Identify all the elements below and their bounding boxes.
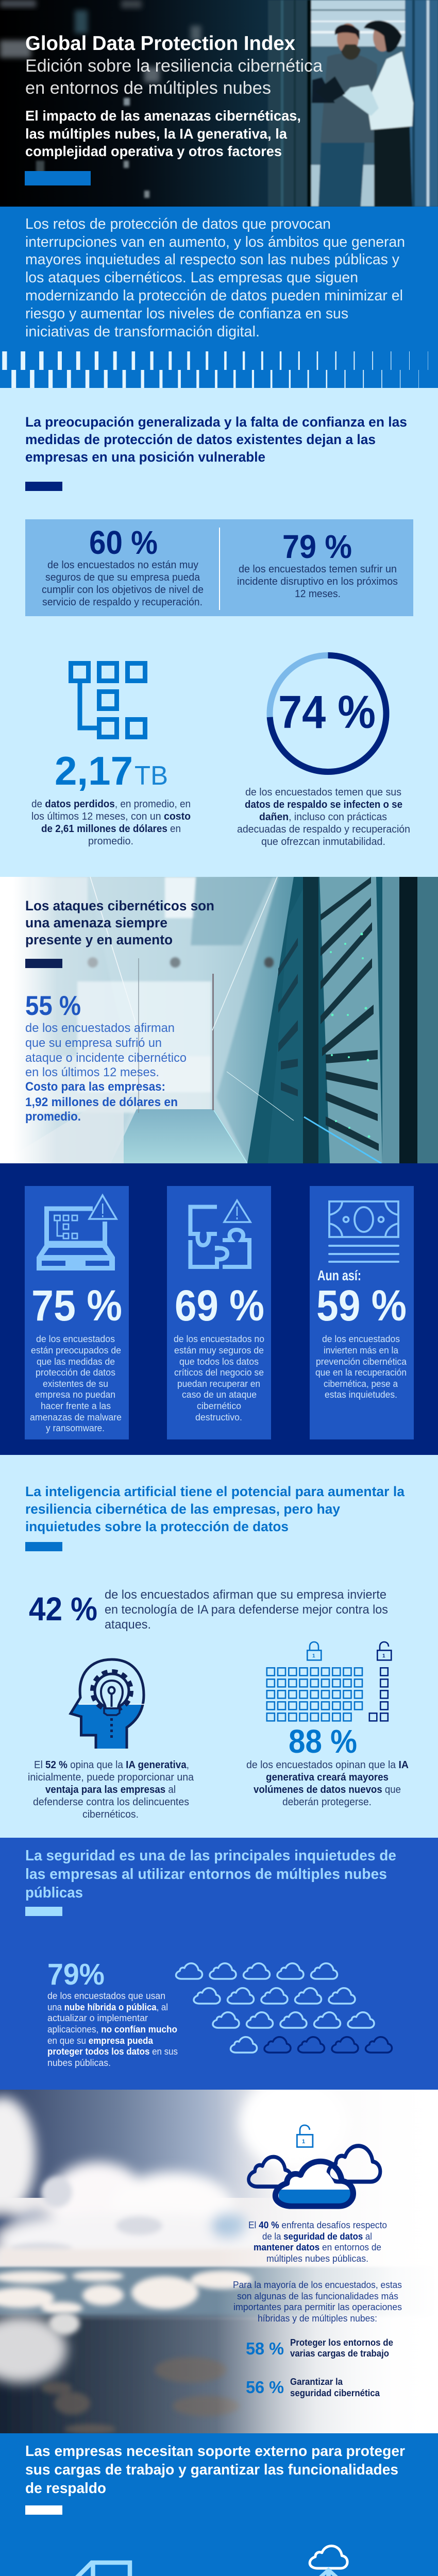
- subtitle: las múltiples nubes, la IA generativa, la: [25, 126, 287, 142]
- stat box: 60 % and 79 %: [25, 519, 413, 616]
- intro text: [25, 216, 405, 340]
- subtitle: [25, 108, 301, 159]
- heading: vulnerable position: La preocupación generalizada y la falta de confianza en las: [25, 414, 407, 430]
- heading: attacks: [25, 898, 214, 947]
- title: Edición sobre la resiliencia cibernética: [25, 56, 323, 76]
- heading: vulnerable position: empresas en una posición vulnerable: [25, 449, 265, 465]
- text: prevention investment: invierten más en la: [324, 1345, 399, 1355]
- text: attack cost: de los encuestados afirman: [25, 1021, 175, 1035]
- text: capabilities intro: [233, 2280, 402, 2324]
- card: 75 %: [25, 1186, 129, 1439]
- intro text: modernizando la protección de datos pueden minimizar el: [25, 287, 403, 304]
- text: attack cost: en los últimos 12 meses.: [25, 1065, 159, 1079]
- title: en entornos de múltiples nubes: [25, 78, 271, 98]
- heading: vulnerable position: [25, 414, 407, 465]
- title: Global Data Protection Index: [25, 32, 295, 55]
- stat: 55 %: 55 %: [25, 991, 81, 1021]
- panel: vulnerable position: [0, 388, 438, 877]
- text: 40 %: de la seguridad de datos al: [262, 2231, 372, 2242]
- text: prevention investment: estas inquietudes.: [325, 1389, 397, 1400]
- text: 52 %: [28, 1759, 194, 1820]
- stat: 88 %: 88 %: [289, 1723, 357, 1760]
- text: 40 %: múltiples nubes públicas.: [266, 2253, 368, 2264]
- accent bar: [25, 2505, 62, 2515]
- heading: external support: Las empresas necesitan soporte externo para proteger: [25, 2443, 405, 2460]
- panel: public cloud security: [0, 1838, 438, 2090]
- text: 52 %: cibernéticos.: [82, 1809, 139, 1820]
- text: 79%: actualizar o implementar: [47, 2013, 148, 2023]
- text: malware worry: de los encuestados: [36, 1334, 115, 1344]
- intro text: los ataques cibernéticos. Las empresas que siguen: [25, 269, 358, 286]
- heading: attacks: Los ataques cibernéticos son: [25, 898, 214, 913]
- icon: three clouds: [248, 2146, 380, 2209]
- heading: external support: de respaldo: [25, 2480, 106, 2497]
- text: malware worry: hacer frente a las: [41, 1401, 111, 1411]
- text: attack cost: que su empresa sufrió un: [25, 1036, 162, 1050]
- card: 69 %: 69 %: [175, 1281, 264, 1330]
- icon: open lock: [377, 1642, 391, 1660]
- heading: public cloud: [25, 1848, 396, 1901]
- heading: attacks: presente y en aumento: [25, 932, 173, 947]
- subtitle: El impacto de las amenazas cibernéticas,: [25, 108, 301, 124]
- text: critical data: destructivo.: [195, 1412, 242, 1422]
- text: malware worry: protección de datos: [36, 1367, 115, 1378]
- chart: 88 % square grid: [267, 1668, 388, 1721]
- stat: 2,17 TB: TB: [134, 761, 168, 791]
- text: backup infected: dañen, incluso con prácticas: [259, 811, 387, 823]
- text: 52 %: defenderse contra los delincuentes: [33, 1797, 189, 1808]
- heading: external support: sus cargas de trabajo y garantizar las funcionalidades: [25, 2462, 398, 2478]
- stat: 58 %: 58 %: [246, 2339, 284, 2358]
- text: critical data: caso de un ataque: [182, 1389, 257, 1400]
- stat: 42 %: de los encuestados afirman que su empresa invierte: [105, 1588, 386, 1602]
- text: backup infected: adecuadas de respaldo y recuperación: [237, 824, 410, 835]
- accent bar: [25, 482, 62, 491]
- stat: 2,17 TB: [55, 748, 168, 793]
- text: malware worry: existentes de su: [43, 1379, 108, 1389]
- text: prevention investment: [315, 1334, 407, 1400]
- photo: server corridor: [0, 877, 438, 1163]
- text: critical data: están muy seguros de: [174, 1345, 264, 1355]
- intro text: Los retos de protección de datos que provocan: [25, 216, 331, 232]
- text: malware worry: empresa no puedan: [35, 1389, 115, 1400]
- stat: 60 %: servicio de respaldo y recuperación.: [42, 597, 203, 608]
- photo: sky and clouds: [0, 2076, 438, 2439]
- text: attack cost: 1,92 millones de dólares en: [25, 1095, 178, 1109]
- text: backup infected: de los encuestados temen que sus: [245, 787, 401, 798]
- heading: AI: [25, 1484, 405, 1534]
- text: 79%: nubes públicas.: [47, 2058, 111, 2068]
- stat: 42 %: en tecnología de IA para defenderse mejor contra los: [105, 1603, 388, 1617]
- chart: 74 % ring: [270, 655, 386, 772]
- text: data lost: promedio.: [88, 836, 133, 847]
- panel: artificial intelligence: [0, 1455, 438, 1838]
- stat: 79 %: [237, 528, 398, 600]
- icon: document with magnifier: [72, 2563, 170, 2576]
- chart: 20 clouds: [176, 1963, 392, 2053]
- icon: banknote: [329, 1201, 398, 1262]
- stat: 79 %: 79 %: [282, 528, 352, 565]
- text: data lost: de 2,61 millones de dólares en: [41, 823, 181, 835]
- icon: open lock: 1: [382, 1653, 385, 1659]
- chart: 74 % ring: 74 %: [278, 687, 376, 738]
- stat: 58 %: varias cargas de trabajo: [290, 2348, 389, 2359]
- stat: 60 %: de los encuestados no están muy: [47, 560, 198, 571]
- text: 79%: proteger todos los datos en sus: [47, 2046, 178, 2057]
- text: 52 %: inicialmente, puede proporcionar una: [28, 1772, 194, 1783]
- text: 79%: una nube híbrida o pública, al: [47, 2002, 168, 2012]
- text: critical data: puedan recuperar en: [177, 1379, 260, 1389]
- stat: 60 %: cumplir con los objetivos de nivel de: [42, 584, 204, 596]
- text: prevention investment: de los encuestados: [322, 1334, 400, 1344]
- text: malware worry: amenazas de malware: [30, 1412, 122, 1422]
- text: prevention investment: que en la recuperación: [315, 1367, 407, 1378]
- heading: attacks: una amenaza siempre: [25, 915, 167, 930]
- icon: laptop alert: [37, 1195, 116, 1270]
- text: critical data: que todos los datos: [179, 1357, 259, 1367]
- text: prevention investment: prevención cibernética: [316, 1357, 407, 1367]
- card: 75 %: 75 %: [31, 1281, 122, 1330]
- text: 79%: en que su empresa pueda: [47, 2036, 154, 2046]
- card: 59 %: Aun así:: [317, 1267, 361, 1283]
- text: 88 %: de los encuestados opinan que la IA: [246, 1759, 409, 1771]
- heading: public cloud: las empresas al utilizar entornos de múltiples nubes: [25, 1866, 387, 1883]
- text: prevention investment: cibernética, pese a: [324, 1379, 398, 1389]
- card: 69 %: [167, 1186, 271, 1439]
- text: critical data: críticos del negocio se: [174, 1367, 264, 1378]
- icon: closed lock: [307, 1642, 321, 1660]
- stat: 60 %: 60 %: [89, 524, 158, 561]
- stat: 42 %: [29, 1588, 388, 1632]
- intro text: iniciativas de transformación digital.: [25, 324, 260, 340]
- icon: folder with cloud upload: [281, 2546, 347, 2576]
- text: 40 %: mantener datos en entornos de: [254, 2242, 381, 2252]
- text: critical data: cibernético: [197, 1401, 241, 1411]
- text: data lost: [31, 799, 191, 847]
- text: capabilities intro: importantes para permitir las operaciones: [233, 2302, 402, 2312]
- stat: 56 %: Garantizar la: [290, 2377, 343, 2387]
- text: 79%: aplicaciones, no confían mucho: [47, 2024, 177, 2035]
- heading: AI: La inteligencia artificial tiene el potencial para aumentar la: [25, 1484, 405, 1499]
- text: 79%: de los encuestados que usan: [47, 1991, 165, 2001]
- text: capabilities intro: Para la mayoría de los encuestados, estas: [233, 2280, 402, 2290]
- text: 40 %: El 40 % enfrenta desafíos respecto: [248, 2220, 387, 2230]
- stat: 56 %: seguridad cibernética: [290, 2388, 380, 2398]
- heading: public cloud: La seguridad es una de las principales inquietudes de: [25, 1848, 396, 1864]
- stat: 60 %: seguros de que su empresa pueda: [45, 572, 200, 583]
- stat: 79 %: incidente disruptivo en los próximos: [237, 576, 398, 587]
- icon: head with gear and light bulb: [71, 1659, 145, 1749]
- icon: data blocks: [71, 664, 145, 737]
- panel: intro: [0, 207, 438, 388]
- text: backup infected: [237, 787, 410, 848]
- text: 52 %: ventaja para las empresas al: [45, 1784, 176, 1795]
- title: [25, 32, 323, 98]
- accent bar: [25, 959, 62, 968]
- intro text: riesgo y aumentar los niveles de confianza en sus: [25, 306, 348, 322]
- card: 59 %: 59 %: [316, 1281, 407, 1330]
- icon: open lock: 1: [302, 2139, 305, 2145]
- text: malware worry: que las medidas de: [37, 1357, 115, 1367]
- text: backup infected: que ofrezcan inmutabilidad.: [261, 836, 385, 848]
- hero photo: engineers in data center: [0, 0, 438, 207]
- stat: 79%: 79%: [47, 1958, 105, 1991]
- panel: external support: [0, 2433, 438, 2576]
- panel: three stats: [0, 1163, 438, 1455]
- icon: puzzle alert: [191, 1200, 250, 1267]
- text: backup infected: datos de respaldo se infecten o se: [245, 799, 402, 810]
- text: capabilities intro: son algunas de las funcionalidades más: [237, 2291, 398, 2301]
- stat: 58 %: [246, 2337, 393, 2359]
- hero accent bar: [25, 171, 91, 185]
- text: attack cost: ataque o incidente cibernético: [25, 1051, 187, 1065]
- text: malware worry: y ransomware.: [46, 1423, 105, 1433]
- card: 59 %: [310, 1186, 414, 1439]
- heading: AI: inquietudes sobre la protección de datos: [25, 1519, 289, 1534]
- text: 88 %: generativa creará mayores: [266, 1772, 389, 1783]
- text: 88 %: volúmenes de datos nuevos que: [254, 1784, 401, 1795]
- heading: public cloud: públicas: [25, 1885, 83, 1901]
- text: 79%: [47, 1991, 178, 2068]
- stat: 58 %: Proteger los entornos de: [290, 2337, 393, 2348]
- text: attack cost: [25, 1021, 187, 1124]
- intro text: mayores inquietudes al respecto son las nubes públicas y: [25, 251, 399, 268]
- text: attack cost: promedio.: [25, 1110, 81, 1124]
- text: critical data: de los encuestados no: [174, 1334, 264, 1344]
- stat: 79 %: 12 meses.: [295, 588, 341, 600]
- intro text: interrupciones van en aumento, y los ámbitos que generan: [25, 234, 405, 250]
- text: malware worry: [30, 1334, 122, 1433]
- stat: 42 %: ataques.: [105, 1618, 151, 1632]
- icon: open lock: [297, 2125, 313, 2147]
- text: attack cost: Costo para las empresas:: [25, 1080, 165, 1094]
- stat: 42 %: 42 %: [29, 1590, 97, 1628]
- stat: 56 %: [246, 2377, 380, 2398]
- icon: closed lock: 1: [312, 1653, 315, 1659]
- stat: 60 %: [42, 524, 204, 608]
- text: 88 %: deberán protegerse.: [282, 1797, 372, 1808]
- heading: AI: resiliencia cibernética de las empresas, pero hay: [25, 1501, 340, 1517]
- text: malware worry: están preocupados de: [31, 1345, 121, 1355]
- heading: external support: [25, 2443, 405, 2497]
- accent bar: [25, 1907, 62, 1916]
- stat: 56 %: 56 %: [246, 2378, 284, 2397]
- stat: 79 %: de los encuestados temen sufrir un: [239, 564, 397, 575]
- subtitle: complejidad operativa y otros factores: [25, 143, 282, 159]
- text: 88 %: [246, 1759, 409, 1808]
- text: 52 %: El 52 % opina que la IA generativa,: [34, 1759, 189, 1771]
- text: critical data: [174, 1334, 264, 1422]
- text: 40 %: [248, 2220, 387, 2264]
- stat: 2,17 TB: 2,17: [55, 748, 133, 793]
- text: capabilities intro: híbridas y de múltiples nubes:: [258, 2313, 377, 2324]
- text: data lost: los últimos 12 meses, con un costo: [31, 811, 191, 822]
- heading: vulnerable position: medidas de protección de datos existentes dejan a las: [25, 432, 376, 447]
- text: data lost: de datos perdidos, en promedio, en: [31, 799, 191, 810]
- accent bar: [25, 1542, 62, 1551]
